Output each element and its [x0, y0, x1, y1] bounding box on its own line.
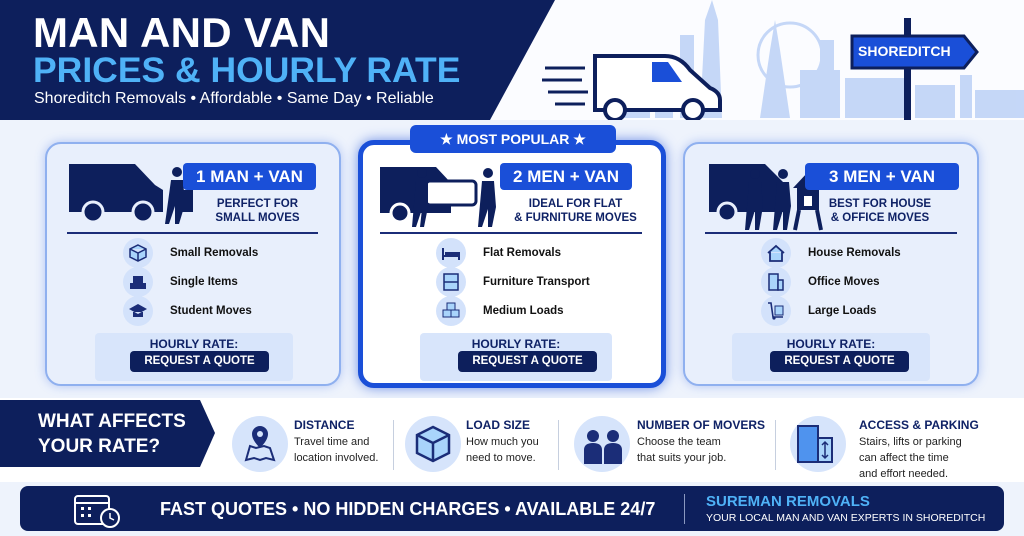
subtitle: ideal for flat: & FURNITURE MOVES: [514, 212, 637, 224]
list: card 1 items: [123, 238, 258, 326]
item: small removals: [123, 238, 258, 268]
hourly rate box 2: REQUEST A QUOTE: [472, 355, 583, 367]
subtitle: best for house: & OFFICE MOVES: [831, 212, 929, 224]
skyline: [620, 0, 1024, 118]
factor: access & parking: ACCESS & PARKING: [859, 418, 979, 432]
list: card 1 items: Single Items: [170, 276, 238, 288]
badge: 1 man + van: 1 MAN + VAN: [196, 167, 303, 186]
footer slogan: FAST QUOTES • NO HIDDEN CHARGES • AVAILABLE 24/7: [160, 499, 655, 519]
factor: distance: [232, 416, 378, 472]
subtitle: ideal for flat: IDEAL FOR FLAT: [529, 198, 622, 210]
item: large loads: [761, 296, 876, 326]
panel: 1 man + van: [45, 142, 341, 386]
heading: what affects your rate: [0, 400, 215, 467]
factor: distance: Travel time and: [294, 436, 369, 448]
icon: calendar clock: [74, 495, 120, 528]
band background: [0, 398, 1024, 482]
factor: load size: [405, 416, 539, 472]
item: student moves: [123, 296, 252, 326]
icon: van with man: [69, 164, 193, 224]
factor: load size: How much you: [466, 436, 539, 448]
badge: 1 man + van: [183, 163, 316, 190]
item: furniture transport: [436, 268, 590, 296]
factor: access & parking: Stairs, lifts or parking: [859, 436, 962, 448]
heading: what affects your rate: YOUR RATE?: [38, 436, 160, 457]
list: card 2 items: Flat Removals: [483, 247, 561, 259]
title: MAN AND VAN: [33, 9, 330, 56]
signpost: SHOREDITCH: [858, 43, 951, 59]
hourly rate box 1: HOURLY RATE:: [150, 337, 238, 351]
list: card 3 items: Office Moves: [808, 276, 880, 288]
hourly rate box 2: [420, 333, 612, 381]
badge: most popular: ★ MOST POPULAR ★: [440, 131, 586, 147]
panel: 3 men + van: [683, 142, 979, 386]
icon: van with two men and sofa: [380, 167, 496, 227]
hourly rate box 1: [95, 333, 293, 381]
badge: most popular: [410, 125, 616, 153]
subtitle: best for house: BEST FOR HOUSE: [829, 198, 931, 210]
list: card 1 items: Small Removals: [170, 247, 258, 259]
badge: 3 men + van: [805, 163, 959, 190]
item: single items: [123, 268, 238, 296]
factor: load size: need to move.: [466, 452, 536, 464]
factor: number of movers: that suits your job.: [637, 452, 726, 464]
hourly rate box 3: HOURLY RATE:: [787, 337, 875, 351]
panel: 2 men + van (most popular): [358, 140, 666, 388]
footer bar: [20, 486, 1004, 531]
footer bar: YOUR LOCAL MAN AND VAN EXPERTS IN SHOREDITCH: [706, 512, 985, 524]
subtitle: perfect for small moves: [215, 198, 300, 224]
factor: load size: LOAD SIZE: [466, 418, 530, 432]
subtitle: Shoreditch Removals • Affordable • Same Day • Reliable: [34, 90, 434, 107]
subtitle: perfect for small moves: PERFECT FOR: [217, 198, 298, 210]
list: card 3 items: House Removals: [808, 247, 901, 259]
subtitle: ideal for flat: [514, 198, 637, 224]
item: medium loads: [436, 296, 564, 326]
factor: number of movers: NUMBER OF MOVERS: [637, 418, 765, 432]
badge: 2 men + van: [500, 163, 632, 190]
header panel: [0, 0, 1024, 120]
list: card 2 items: Medium Loads: [483, 305, 564, 317]
list: card 1 items: Student Moves: [170, 305, 252, 317]
icon: moving van: [542, 54, 722, 120]
hourly rate box 3: [732, 333, 930, 381]
item: office moves: [761, 268, 880, 296]
list: card 2 items: Furniture Transport: [483, 276, 590, 288]
factor: access & parking: and effort needed.: [859, 468, 948, 480]
item: flat removals: [436, 238, 561, 268]
hourly rate box 2: HOURLY RATE:: [472, 337, 560, 351]
list: card 3 items: Large Loads: [808, 305, 876, 317]
item: house removals: [761, 238, 901, 268]
hourly rate box 1: REQUEST A QUOTE: [144, 355, 255, 367]
factor: number of movers: [574, 416, 765, 472]
header panel: PRICES & HOURLY RATE: [33, 50, 460, 90]
factor: distance: DISTANCE: [294, 418, 354, 432]
badge: 3 men + van: 3 MEN + VAN: [829, 167, 935, 186]
subtitle: best for house: [829, 198, 931, 224]
factor: access & parking: [790, 416, 979, 480]
list: card 3 items: [761, 238, 901, 326]
hourly rate box 3: REQUEST A QUOTE: [784, 355, 895, 367]
heading: what affects your rate: WHAT AFFECTS: [38, 411, 186, 432]
icon: van with three men and house: [709, 164, 823, 230]
factor: access & parking: can affect the time: [859, 452, 949, 464]
badge: 2 men + van: 2 MEN + VAN: [513, 167, 619, 186]
list: card 2 items: [436, 238, 590, 326]
subtitle: perfect for small moves: SMALL MOVES: [215, 212, 300, 224]
signpost: [850, 18, 979, 120]
brand: SUREMAN REMOVALS: [706, 493, 870, 510]
factor: distance: location involved.: [294, 452, 378, 464]
factor: number of movers: Choose the team: [637, 436, 721, 448]
